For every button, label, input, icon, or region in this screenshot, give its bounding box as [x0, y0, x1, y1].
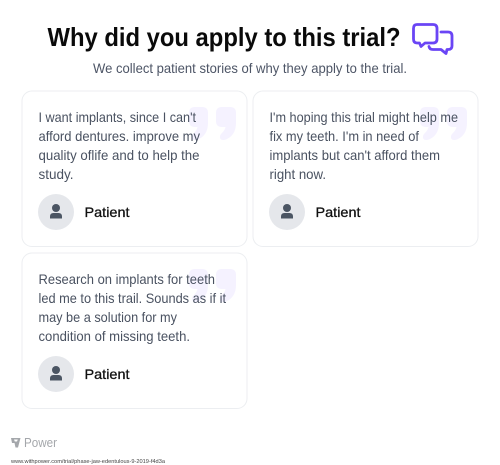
title: Why did you apply to this trial? — [48, 22, 400, 52]
story 1 text — [38, 110, 200, 182]
story 1 text: quality oflife and to help the — [38, 148, 200, 163]
story 1 text: study. — [38, 167, 74, 182]
patient label 3: Patient — [84, 366, 130, 382]
story 3 text: Research on implants for teeth — [38, 272, 215, 287]
story 2 text: implants but can't afford them — [270, 148, 440, 163]
subtitle: We collect patient stories of why they apply to the trial. — [93, 61, 407, 76]
story 2 text: I'm hoping this trial might help me — [270, 110, 458, 125]
avatar 1 — [38, 194, 74, 230]
story 2 text: right now. — [270, 167, 326, 182]
story 2 text — [270, 110, 458, 182]
story 3 text: condition of missing teeth. — [38, 329, 190, 344]
footer logo: Power — [11, 435, 58, 450]
story 3 text: led me to this trail. Sounds as if it — [38, 291, 226, 306]
story 3 text — [38, 272, 226, 344]
story 1 text: I want implants, since I can't — [38, 110, 196, 125]
icon: quotation mark 2 — [420, 107, 467, 140]
story 1 text: afford dentures. improve my — [38, 129, 200, 144]
footer url: www.withpower.com/trial/phase-jaw-edentulous-9-2019-f4d3a — [10, 459, 166, 465]
avatar 2 — [269, 194, 305, 230]
icon: quotation mark 1 — [189, 107, 236, 140]
footer logo: Power: Power — [24, 435, 58, 450]
patient label 2: Patient — [316, 204, 361, 220]
panel: patient story 3 — [22, 253, 247, 408]
icon: quotation mark 3 — [189, 269, 236, 302]
avatar 3 — [38, 356, 74, 392]
panel: patient story 2 — [253, 91, 478, 246]
icon: chat bubbles — [414, 24, 452, 54]
story 2 text: fix my teeth. I'm in need of — [270, 129, 419, 144]
panel: patient story 1 — [22, 91, 247, 246]
story 3 text: may be a solution for my — [38, 310, 177, 325]
patient label 1: Patient — [84, 204, 130, 220]
